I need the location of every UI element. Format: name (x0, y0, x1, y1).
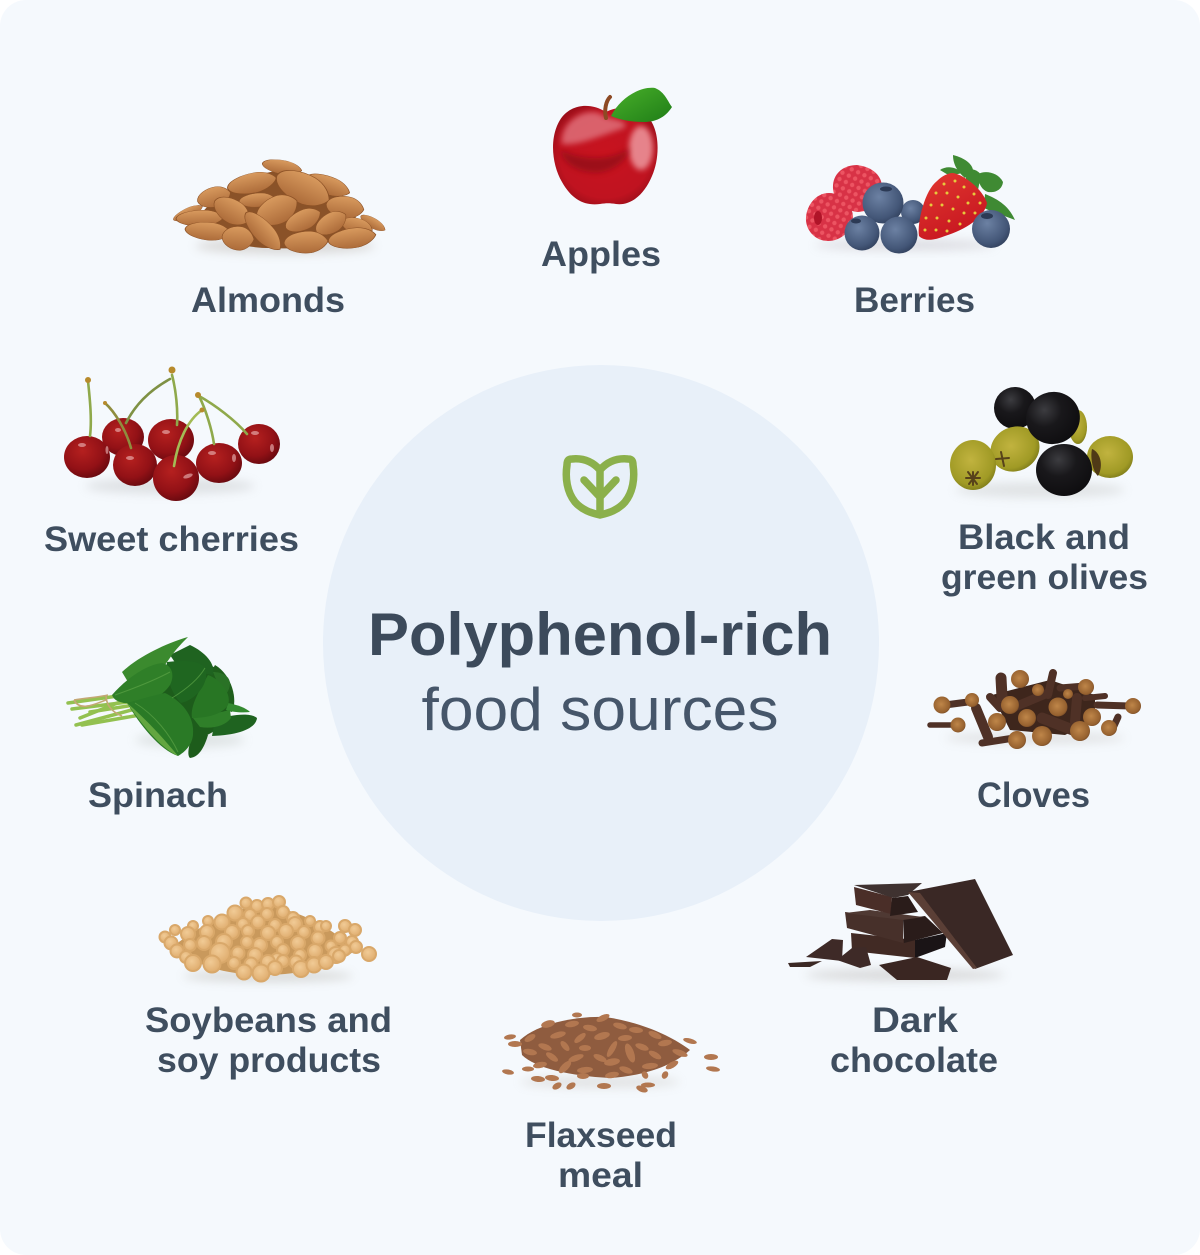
heading: food sources (422, 676, 778, 743)
label: almonds: Almonds (191, 281, 345, 320)
panel: cloves (930, 670, 1141, 815)
icon: olives (950, 384, 1133, 498)
heading (368, 601, 832, 743)
label: dark chocolate (830, 1001, 998, 1080)
icon: berries (806, 155, 1015, 254)
icon: cherries (64, 366, 280, 501)
label: cloves: Cloves (977, 776, 1090, 815)
icon: soybeans (160, 896, 376, 982)
icon: almonds (171, 157, 388, 256)
panel: apples (541, 88, 672, 274)
label: apples: Apples (541, 235, 661, 274)
label: dark chocolate: chocolate (830, 1041, 998, 1080)
label: berries: Berries (854, 281, 975, 320)
icon: flaxseed (502, 1012, 720, 1094)
icon: chocolate (788, 879, 1013, 981)
label: soybeans (145, 1001, 392, 1080)
panel: soybeans (145, 896, 392, 1080)
panel: sweet cherries (44, 366, 299, 559)
panel: spinach (68, 637, 257, 815)
label: flaxseed (525, 1116, 677, 1195)
central circle (323, 365, 879, 921)
icon: spinach (68, 637, 257, 758)
label: spinach: Spinach (88, 776, 228, 815)
label: flaxseed: meal (558, 1156, 643, 1195)
icon: apple (553, 88, 672, 204)
panel: olives (941, 384, 1148, 597)
heading: Polyphenol-rich (368, 601, 832, 668)
label: soybeans: Soybeans and (145, 1001, 392, 1040)
panel: almonds (171, 157, 388, 320)
panel: flaxseed (502, 1012, 720, 1195)
label: sweet cherries: Sweet cherries (44, 520, 299, 559)
label: olives (941, 518, 1148, 597)
label: olives: Black and (958, 518, 1130, 557)
label: soybeans: soy products (157, 1041, 381, 1080)
panel: berries (806, 155, 1015, 320)
icon: cloves (930, 670, 1141, 749)
label: dark chocolate: Dark (872, 1001, 959, 1040)
panel: dark chocolate (788, 879, 1013, 1080)
icon: leaf logo (566, 459, 634, 515)
label: olives: green olives (941, 558, 1148, 597)
label: flaxseed: Flaxseed (525, 1116, 677, 1155)
